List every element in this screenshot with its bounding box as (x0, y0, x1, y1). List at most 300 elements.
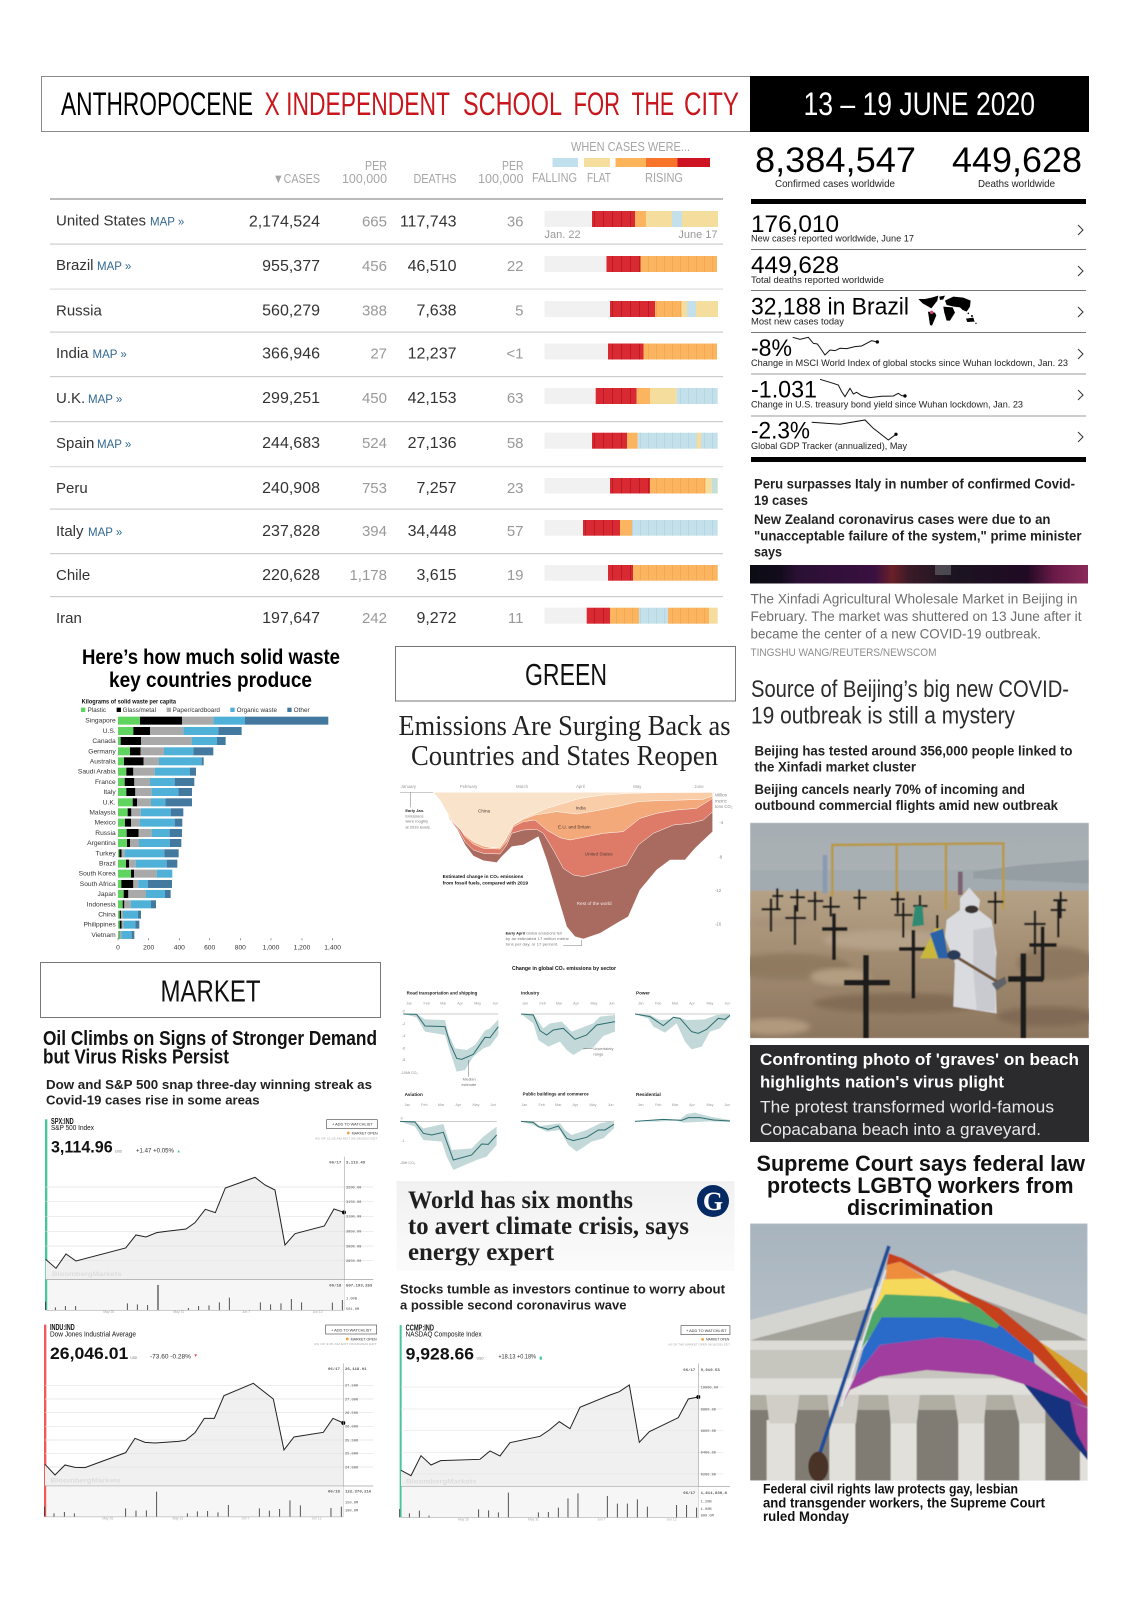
row: Brazil: MAP » (97, 261, 131, 273)
panel: industry: Uncertainty (593, 1046, 613, 1051)
text: stocks tumble: a possible second coronavirus wave (400, 1298, 626, 1312)
guardian headline box: World has six months (408, 1187, 633, 1214)
watchlist button: + ADD TO WATCHLIST (686, 1328, 727, 1333)
price axis: 06/17 (683, 1491, 696, 1496)
panel: public buildings and commerce: May (590, 1103, 597, 1107)
stock chart: NASDAQ (400, 1324, 730, 1521)
price axis: 3,113.49 (346, 1162, 366, 1166)
country labels: Russia (95, 830, 116, 837)
table header (273, 139, 710, 186)
table header: PER (502, 158, 524, 173)
row: U.K.: MAP » (88, 394, 122, 406)
date labels: Jun 12 (313, 1310, 323, 1314)
news bullets: Peru and New Zealand: Peru surpasses Italy in number of confirmed Covid- (754, 476, 1075, 492)
price axis: 122,370,216 (345, 1491, 372, 1495)
price axis: 3050.00 (346, 1231, 361, 1235)
confirmed cases worldwide: 8,384,547 (755, 141, 916, 180)
chart annotation: early April: by an estimated 17 million metric (506, 936, 569, 941)
panel: power: Apr (689, 1002, 696, 1006)
date: 13 – 19 JUNE 2020 (804, 86, 1035, 122)
area labels: United States (585, 852, 613, 857)
panel: power: Jan (638, 1002, 644, 1006)
chart header (50, 1323, 197, 1363)
chart header: -73.60 -0.28% (150, 1355, 192, 1361)
x axis: 600 (204, 944, 215, 951)
row: Russia: 7,638 (416, 302, 457, 320)
headline: Supreme Court: discrimination (847, 1195, 994, 1220)
photo caption: Xinfadi market (750, 590, 1082, 659)
price axis: 26.00K (345, 1426, 359, 1430)
chart header: CCMP:IND (406, 1324, 434, 1333)
area labels: India (576, 806, 586, 811)
panel: road transportation and shipping: Median (463, 1077, 476, 1082)
row: Spain (56, 433, 718, 452)
flag (920, 928, 948, 958)
area labels: Rest of the world (577, 901, 612, 906)
price axis (328, 1367, 372, 1513)
table header: WHEN CASES WERE... (571, 139, 690, 154)
panel: road transportation and shipping: May (474, 1002, 481, 1006)
price axis: 25.00K (345, 1453, 359, 1457)
country labels: South Africa (80, 881, 116, 888)
stat: MSCI World Index: -8% (751, 335, 792, 362)
covid table (50, 139, 723, 627)
crosses (762, 888, 1067, 1038)
watchlist button: AS OF THE MARKET OPEN 06/18/2020 EDT (668, 1342, 730, 1346)
row: Italy: MAP » (88, 527, 122, 539)
section box: MARKET: MARKET (160, 974, 261, 1008)
date labels: Jun 7 (242, 1310, 250, 1314)
confirmed cases worldwide: Confirmed cases worldwide (775, 178, 895, 190)
table header: RISING (645, 170, 683, 185)
stat: most new cases: 32,188 in Brazil (751, 294, 909, 320)
chart annotation: early January (405, 792, 431, 829)
panel: public buildings and commerce: Feb (538, 1103, 545, 1107)
chart header: 9,928.66 (406, 1344, 474, 1363)
price axis: 27.00K (345, 1398, 359, 1402)
panel: aviation: Jan (404, 1103, 410, 1107)
panel: aviation: Mar (438, 1103, 445, 1107)
chart annotation: early January: Early Jan. (405, 808, 424, 813)
price axis: 3100.00 (346, 1216, 361, 1220)
row: Brazil (56, 256, 717, 275)
title: FOR (574, 86, 620, 122)
x axis (116, 938, 341, 951)
country labels: Indonesia (87, 901, 116, 908)
country labels: U.S. (103, 728, 116, 735)
sparkline (812, 420, 898, 440)
panel: industry: Mar (556, 1002, 563, 1006)
panel: residential: Jan (638, 1103, 644, 1107)
x axis: 0 (116, 944, 120, 951)
section box: GREEN: GREEN (525, 657, 607, 692)
country labels: Italy (103, 789, 116, 796)
photo caption: Supreme Court: ruled Monday (763, 1508, 849, 1524)
subheading: Dow and S&P: Covid-19 cases rise in some areas (46, 1092, 260, 1108)
country labels: Vietnam (91, 932, 116, 939)
panel: road transportation and shipping: estimate (461, 1082, 477, 1087)
stat: most new cases (751, 294, 1083, 328)
row: Italy: 34,448 (408, 523, 457, 540)
country labels: France (95, 779, 116, 786)
icon: guardian logo: G (703, 1187, 723, 1216)
panel: residential: Mar (672, 1103, 679, 1107)
panel: road transportation and shipping: -8 (402, 1058, 405, 1062)
date labels: Jun 12 (667, 1517, 677, 1521)
section box: MARKET (40, 962, 380, 1018)
price area and line (46, 1177, 344, 1279)
photo caption: Supreme Court (763, 1480, 1045, 1524)
guardian headline box: energy expert (408, 1239, 555, 1266)
panel: aviation: -2Mt CO₂ (400, 1161, 416, 1165)
table header: ▼CASES (273, 171, 320, 186)
axis values: Million (715, 793, 728, 798)
price axis: 501.0M (346, 1308, 359, 1312)
caption panel: graves on beach: The protest transformed world-famous (760, 1098, 1054, 1116)
stock chart: Dow Jones (44, 1323, 377, 1520)
axis values (715, 793, 733, 927)
chart header: +18.13 +0.18% (498, 1355, 537, 1361)
row: U.K. (56, 388, 718, 407)
panel: residential: Jun (724, 1103, 730, 1107)
panel: road transportation and shipping: Feb (424, 1002, 430, 1006)
news bullets: Beijing: Beijing cancels nearly 70% of incoming and (754, 782, 1025, 797)
country labels: Canada (92, 738, 116, 745)
country labels: Singapore (85, 718, 116, 725)
row: United States: United States (56, 212, 146, 230)
title: THE (632, 86, 674, 122)
panel: residential: Apr (689, 1103, 696, 1107)
stat: treasury yield: -1.031 (751, 376, 817, 404)
price axis: 27.50K (345, 1385, 359, 1389)
watermark: BloombergMarkets (51, 1478, 121, 1485)
headline: oil climbs: Oil Climbs on Signs of Stronger Demand (43, 1028, 377, 1050)
news bullets: Beijing: outbound commercial flights amid new outbreak (754, 798, 1058, 813)
panel: industry: Apr (573, 1002, 580, 1006)
row: United States: 665 (362, 214, 387, 230)
chart header: S&P 500 Index (51, 1123, 94, 1132)
volume bars (46, 1298, 342, 1310)
row: Chile: Chile (56, 567, 90, 584)
subheading: Dow and S&P (46, 1077, 372, 1108)
price axis: 06/18 (328, 1490, 341, 1495)
price axis (329, 1161, 373, 1312)
chart header: Dow Jones Industrial Average (50, 1329, 136, 1338)
stacked areas (433, 792, 713, 939)
area labels: E.U. and Britain (558, 825, 591, 830)
row: Iran (56, 608, 718, 627)
row: Iran: 11 (508, 610, 524, 627)
photo caption: Xinfadi market: TINGSHU WANG/REUTERS/NEWSCOM (750, 647, 936, 659)
price axis: 507,193,253 (346, 1285, 373, 1289)
price axis: 150.0M (345, 1501, 358, 1505)
country labels: Japan (98, 891, 116, 898)
row: U.K.: 42,153 (408, 390, 457, 407)
row: Russia (56, 301, 718, 320)
stacked bars (118, 717, 328, 939)
sector chart title: Change in global CO₂ emissions by sector (512, 966, 616, 972)
worldwide stats panel (751, 141, 1086, 462)
row: United States: 36 (507, 214, 524, 230)
price area and line (401, 1385, 699, 1486)
table header: FALLING (532, 170, 577, 185)
header title bar (42, 76, 1089, 132)
price axis: 9600.00 (701, 1430, 716, 1434)
title (61, 86, 739, 122)
row: Chile: 19 (507, 567, 524, 584)
date labels: May 31 (173, 1310, 184, 1314)
volume bars (400, 1493, 697, 1517)
icon: world map (918, 296, 977, 326)
row: India: <1 (506, 346, 524, 362)
panel: public buildings and commerce: Jan (521, 1103, 527, 1107)
headline: Beijing outbreak: Source of Beijing’s big new COVID- (751, 676, 1069, 703)
chart header (51, 1117, 180, 1156)
chart annotation: early January: Emissions (405, 813, 423, 818)
watchlist button: MARKET OPEN (352, 1131, 378, 1135)
month axis: April (576, 784, 585, 789)
area labels (478, 806, 613, 906)
panel: aviation: May (473, 1103, 480, 1107)
photo: rainbow flag at Supreme Court (750, 1223, 1090, 1482)
price axis: 9,910.53 (701, 1369, 720, 1373)
headline: emissions (398, 711, 730, 772)
panel: aviation (400, 1092, 497, 1170)
panel: industry: May (591, 1002, 598, 1006)
row: U.K.: 63 (507, 390, 524, 407)
panel: public buildings and commerce: Jun (608, 1103, 614, 1107)
chart title: Here’s how much solid waste (82, 646, 340, 669)
axis values: -12 (715, 888, 722, 893)
goal frame (832, 843, 1003, 910)
panel: public buildings and commerce: Public buildings and commerce (523, 1092, 589, 1097)
panel: aviation: Aviation (405, 1092, 423, 1097)
row: Spain: MAP » (97, 439, 131, 451)
row: United States: MAP » (150, 216, 184, 228)
legend: Plastic (88, 707, 106, 714)
chart annotation: estimated change: Estimated change in CO₂ emissions (443, 874, 524, 879)
news bullets: Peru and New Zealand: "unacceptable failure of the system," prime minister (754, 528, 1082, 544)
panel: aviation: 0 (401, 1116, 403, 1120)
chart header: INDU:IND (50, 1323, 75, 1332)
legend: Paper/cardboard (173, 707, 220, 714)
price axis: 10000.00 (701, 1386, 718, 1390)
panel: industry: Feb (539, 1002, 546, 1006)
country labels: Philippines (83, 922, 116, 929)
date labels: May 31 (528, 1517, 539, 1521)
price axis: 26.50K (345, 1412, 359, 1416)
headline: Supreme Court: protects LGBTQ workers from (767, 1173, 1074, 1198)
headline: emissions: Countries and States Reopen (411, 741, 718, 772)
row: India: 366,946 (262, 346, 320, 362)
chart annotation: early January: at 2019 levels. (405, 824, 431, 829)
sector charts (400, 966, 730, 1170)
photo caption: Supreme Court: Federal civil rights law protects gay, lesbian (763, 1480, 1018, 1496)
row: Russia: Russia (56, 302, 103, 320)
row: United States (56, 211, 718, 241)
x axis: 1,400 (324, 944, 341, 951)
table header: FLAT (587, 170, 611, 185)
panel: power: Jun (724, 1002, 730, 1006)
row: Chile: 3,615 (416, 567, 457, 584)
chart header: +1.47 +0.05% (136, 1148, 175, 1154)
photo caption: Supreme Court: and transgender workers, the Supreme Court (763, 1494, 1045, 1510)
row: Iran: Iran (56, 610, 82, 627)
row: Brazil: 955,377 (262, 258, 320, 275)
caption panel: graves on beach: highlights nation's virus plight (760, 1072, 1004, 1092)
flag (1023, 1383, 1088, 1460)
stat: total deaths (751, 252, 1083, 286)
panel: industry (521, 991, 615, 1057)
caption panel: graves on beach (750, 1045, 1089, 1142)
panel: power (635, 991, 730, 1049)
country labels: Germany (88, 748, 116, 755)
axis values: tons CO₂ (715, 804, 733, 809)
chart annotation: estimated change: from fossil fuels, compared with 2019 (443, 880, 528, 885)
stat: global GDP tracker (751, 418, 1083, 452)
panel: power: Feb (655, 1002, 661, 1006)
row: Russia: 5 (515, 302, 524, 320)
table header: 100,000 (478, 171, 524, 186)
row: India: 12,237 (408, 346, 457, 362)
month axis: February (460, 784, 478, 789)
country labels: U.K. (103, 799, 116, 806)
panel: road transportation and shipping: Jun (492, 1002, 498, 1006)
axis values: -8 (718, 854, 723, 859)
price axis: 24.00K (345, 1466, 359, 1470)
headline: Supreme Court (756, 1151, 1086, 1220)
price axis: 1.00B (346, 1297, 358, 1301)
legend: Glass/metal (123, 707, 156, 714)
price axis: 26,118.01 (345, 1368, 367, 1372)
row: United States: 117,743 (400, 214, 457, 230)
row: India (56, 344, 717, 362)
stat: MSCI World Index (751, 335, 1083, 369)
price axis: 9400.00 (701, 1452, 716, 1456)
news bullets: Peru and New Zealand (754, 476, 1082, 560)
country labels: Saudi Arabia (78, 769, 116, 776)
x axis: 200 (143, 944, 155, 951)
panel: road transportation and shipping: Apr (457, 1002, 464, 1006)
x axis: 800 (235, 944, 246, 951)
country labels: Turkey (96, 850, 116, 857)
chart annotation: early April (506, 930, 582, 946)
price axis: 9800.00 (701, 1408, 716, 1412)
panel: residential: May (707, 1103, 714, 1107)
area chart: CO2 emissions (400, 784, 733, 946)
chart title: key countries produce (109, 669, 312, 692)
panel: road transportation and shipping: -4 (402, 1034, 405, 1038)
subheading: Dow and S&P: Dow and S&P 500 snap three-day winning streak as (46, 1077, 372, 1092)
deaths worldwide: 449,628 (952, 141, 1082, 180)
photo caption: Xinfadi market: February. The market was shuttered on 13 June after it (750, 608, 1082, 624)
stat: new cases: New cases reported worldwide, June 17 (751, 234, 914, 244)
panel: road transportation and shipping: -2 (402, 1022, 405, 1026)
row: India: MAP » (92, 349, 127, 361)
row: Italy: Italy (56, 523, 84, 540)
price axis: 06/17 (683, 1368, 696, 1373)
watchlist button: + ADD TO WATCHLIST (332, 1122, 373, 1127)
chart header: USD (130, 1356, 138, 1360)
row: Spain: Spain (56, 435, 94, 452)
row: Italy (56, 520, 718, 540)
columns (767, 1420, 1090, 1481)
headline: Supreme Court: Supreme Court says federal law (756, 1151, 1086, 1176)
row: Iran: 197,647 (262, 610, 320, 627)
price axis (683, 1368, 728, 1519)
row: Peru: 240,908 (262, 480, 320, 497)
row: Chile (56, 565, 718, 584)
price axis: 3200.00 (346, 1186, 361, 1190)
news bullets: Beijing: the Xinfadi market cluster (754, 760, 917, 774)
row: Peru: Peru (56, 480, 88, 497)
caption panel: graves on beach: Copacabana beach into a graveyard. (760, 1121, 1041, 1139)
news bullets: Beijing: Beijing has tested around 356,000 people linked to (754, 744, 1072, 758)
date labels: May 26 (102, 1516, 113, 1520)
deaths worldwide: Deaths worldwide (978, 178, 1055, 190)
news bullets: Peru and New Zealand: New Zealand coronavirus cases were due to an (754, 512, 1050, 527)
x axis: 1,200 (294, 944, 311, 951)
text: stocks tumble: Stocks tumble as investors continue to worry about (400, 1282, 726, 1296)
section box: GREEN (396, 646, 736, 701)
chart annotation: early April: Early April Global emissions fell (506, 930, 562, 935)
panel: road transportation and shipping: -6 (402, 1046, 405, 1050)
panel: power: Power (636, 991, 650, 996)
watchlist button: + ADD TO WATCHLIST (331, 1327, 372, 1332)
panel: industry: range (593, 1052, 604, 1057)
solid waste chart (78, 646, 341, 951)
panel: road transportation and shipping: Jan (406, 1002, 412, 1006)
price axis: 1.20B (701, 1501, 712, 1505)
row: India: 27 (370, 346, 387, 362)
row: Brazil: 46,510 (408, 258, 457, 275)
row: Chile: 220,628 (262, 567, 320, 584)
watermark: BloombergMarkets (406, 1478, 477, 1485)
legend: Other (294, 707, 310, 714)
chart annotation: early January: were roughly (405, 819, 428, 824)
watchlist button: MARKET OPEN (706, 1338, 730, 1342)
photo caption: Xinfadi market: became the center of a new COVID-19 outbreak. (750, 626, 1041, 642)
price axis: 100.0M (345, 1509, 358, 1513)
headline: Beijing outbreak (751, 676, 1069, 730)
chart header: NASDAQ Composite Index (406, 1330, 482, 1339)
x axis: 400 (174, 944, 185, 951)
panel: road transportation and shipping: 0 (403, 1009, 405, 1013)
row: Chile: 1,178 (349, 567, 387, 584)
sparkline (820, 379, 907, 398)
date labels (458, 1517, 677, 1521)
chart header: SPX:IND (51, 1117, 74, 1126)
panel: industry: Jan (522, 1002, 528, 1006)
news bullets: Beijing (754, 744, 1072, 813)
price axis: 25.50K (345, 1439, 359, 1443)
stat: new cases (751, 211, 1083, 244)
row: Brazil: Brazil (56, 257, 94, 274)
row: Brazil: 22 (507, 258, 524, 275)
price axis: 06/17 (329, 1161, 342, 1166)
country labels: Mexico (95, 820, 116, 827)
watermark: BloombergMarkets (52, 1271, 122, 1278)
row: Russia: 388 (362, 302, 387, 320)
panel: industry: Jun (609, 1002, 615, 1006)
price axis: 3150.00 (346, 1201, 361, 1205)
volume bars (45, 1492, 341, 1517)
area labels: China (478, 809, 491, 814)
date labels: May 26 (103, 1310, 114, 1314)
panel: power: Mar (672, 1002, 679, 1006)
row: India: India (56, 345, 89, 362)
axis values: -4 (719, 820, 724, 825)
